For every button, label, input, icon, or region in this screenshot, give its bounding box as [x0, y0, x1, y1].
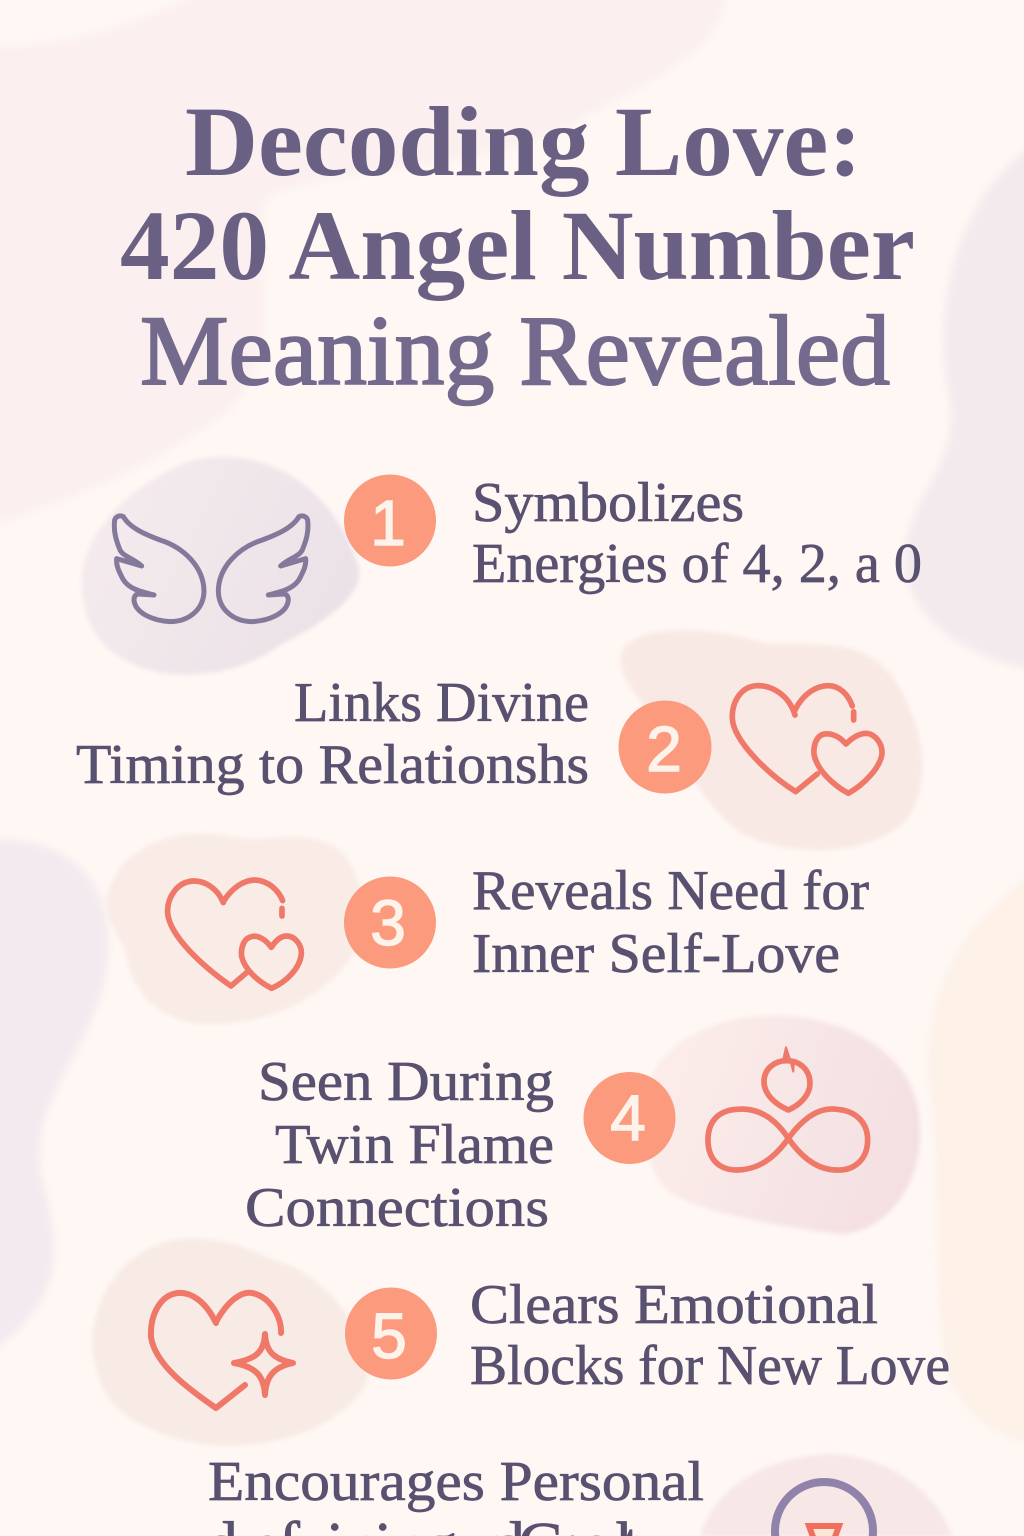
label 4: Connections [245, 1177, 549, 1239]
number badge 2 [618, 700, 712, 794]
label 3: Reveals Need for [472, 860, 869, 922]
icon: heart with sparkle [151, 1293, 293, 1408]
number badge 4 [584, 1072, 676, 1164]
icon backdrop 3 [106, 833, 364, 1024]
icon backdrop 5 [92, 1238, 367, 1446]
item 3: inner self-love [106, 833, 869, 1024]
label 1: Symbolizes [472, 472, 744, 534]
icon backdrop 2 [621, 630, 922, 850]
label 2 [76, 672, 589, 796]
number badge 4: 4 [610, 1082, 646, 1154]
label 6: Encourages Personal [208, 1451, 704, 1513]
label 1 [472, 472, 922, 595]
label 5 [470, 1274, 950, 1397]
number badge 1: 1 [370, 487, 406, 559]
label 5: Blocks for New Love [470, 1335, 950, 1397]
number badge 2: 2 [646, 713, 682, 785]
number badge 3 [344, 876, 436, 968]
item 2: divine timing [76, 630, 922, 850]
title: Decoding Love: [185, 86, 862, 197]
title [120, 86, 915, 406]
title: 420 Angel Number [120, 190, 915, 301]
number badge 3: 3 [370, 887, 406, 959]
number badge 5 [345, 1288, 437, 1380]
icon: two hearts [168, 880, 301, 988]
number badge 1 [344, 474, 436, 566]
item 4: twin flame [245, 1016, 920, 1239]
label 4: Seen During [258, 1051, 554, 1113]
item 5: emotional blocks [92, 1238, 950, 1446]
icon backdrop 1 [82, 457, 359, 675]
item 1: symbolizes energies [82, 457, 922, 675]
icon: infinity and flame circle [708, 1047, 868, 1170]
label 1: Energies of 4, 2, a 0 [472, 533, 922, 595]
number badge 5: 5 [371, 1300, 407, 1372]
icon backdrop 4 [644, 1016, 920, 1234]
label 2: Links Divine [294, 672, 589, 734]
label 4 [245, 1051, 554, 1239]
icon: ring with hourglass [775, 1482, 873, 1536]
icon backdrop 6 [700, 1454, 952, 1536]
icon: two hearts [732, 686, 882, 793]
label 6 [205, 1451, 704, 1536]
label 3 [472, 860, 869, 985]
title: Meaning Revealed [140, 295, 890, 406]
label 4: Twin Flame [275, 1114, 554, 1176]
label 5: Clears Emotional [470, 1274, 878, 1336]
item 6: personal growth [205, 1451, 952, 1536]
label 3: Inner Self-Love [472, 923, 840, 985]
label 2: Timing to Relationshs [76, 734, 589, 796]
icon: angel wings [114, 516, 308, 622]
